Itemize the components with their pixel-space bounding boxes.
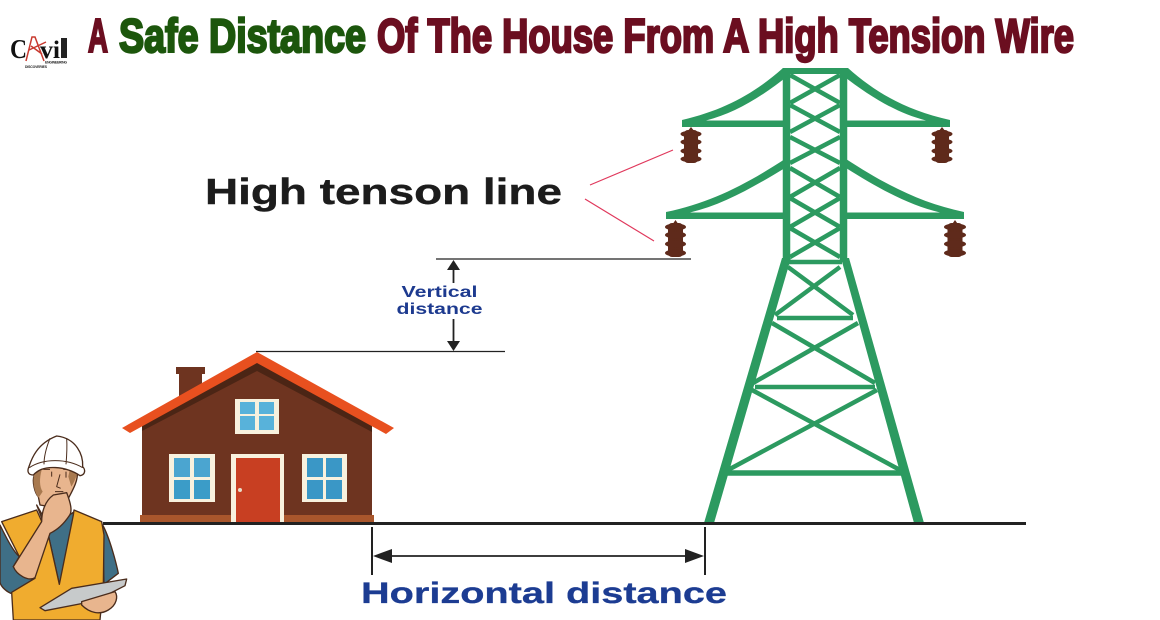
attic window	[235, 399, 279, 434]
label: horizontal distance: Horizontal distance	[361, 577, 727, 610]
title: Safe Distance	[119, 9, 366, 62]
vertical distance dimension	[256, 259, 691, 352]
arm and hand at chin	[13, 493, 71, 579]
title: A	[88, 9, 108, 62]
tower lower lattice	[725, 262, 902, 473]
roof	[122, 352, 394, 434]
logo	[10, 34, 67, 69]
head	[33, 466, 77, 507]
hair	[33, 468, 77, 498]
face details	[43, 469, 71, 492]
label: vertical distance: distance	[396, 301, 483, 318]
insulator: upper left	[680, 127, 702, 163]
vest	[2, 510, 104, 620]
house	[122, 352, 394, 522]
label: vertical distance: Vertical	[402, 284, 478, 301]
insulator: lower left	[665, 220, 686, 257]
tower top section and columns	[783, 68, 848, 262]
insulator: lower right	[944, 220, 966, 257]
chimney	[176, 367, 205, 399]
logo: vi	[40, 37, 60, 64]
tower	[666, 68, 964, 523]
tower upper lattice	[790, 75, 840, 257]
tower legs	[704, 258, 924, 523]
horizontal distance dimension	[372, 527, 705, 575]
left window	[169, 454, 215, 502]
shirt	[37, 505, 74, 584]
label: vertical distance	[396, 284, 483, 318]
logo: DISCOVERIES	[25, 65, 48, 69]
house walls	[142, 362, 372, 522]
engineer figure	[0, 436, 127, 620]
helmet ridges	[29, 438, 83, 468]
right window	[302, 454, 347, 502]
title	[88, 9, 1074, 62]
door	[231, 454, 284, 522]
heading: high tenson line: High tenson line	[205, 171, 562, 212]
tower arms	[666, 68, 964, 219]
hand under tablet	[82, 592, 117, 613]
logo: ENGINEERING	[45, 60, 67, 64]
plinth	[140, 515, 374, 522]
logo: C	[10, 34, 27, 64]
ground line	[103, 522, 1026, 525]
helmet	[28, 436, 85, 476]
insulator: upper right	[932, 127, 952, 163]
tablet	[40, 579, 127, 611]
pointer lines to insulators	[585, 150, 673, 241]
